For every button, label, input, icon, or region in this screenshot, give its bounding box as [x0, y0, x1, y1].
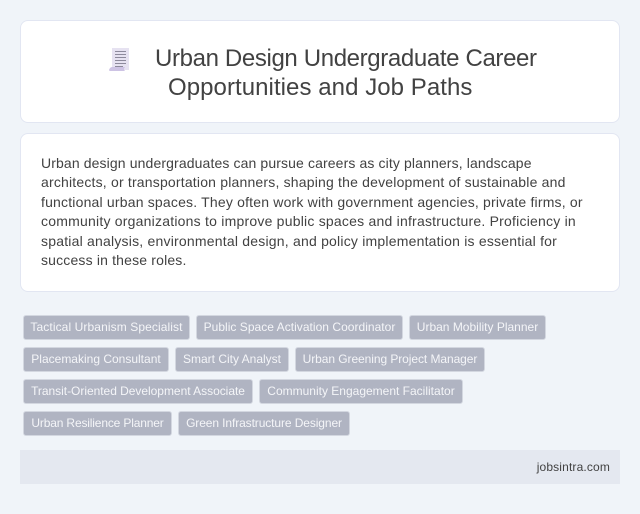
tag: Placemaking Consultant — [31, 352, 161, 366]
tag: Tactical Urbanism Specialist — [30, 320, 183, 334]
tag: Transit-Oriented Development Associate — [31, 384, 245, 398]
tag — [295, 347, 485, 372]
description text: spatial analysis, environmental design, and policy implementation is essential for — [41, 233, 557, 249]
panel: career tags — [23, 315, 546, 436]
tag: Public Space Activation Coordinator — [204, 320, 395, 334]
tag — [23, 315, 190, 340]
footer bar — [20, 450, 620, 484]
description text — [41, 155, 583, 268]
description text: success in these roles. — [41, 252, 187, 268]
tag — [175, 347, 289, 372]
description text: architects, or transportation planners, shaping the development of sustainable and — [41, 174, 566, 190]
footer source text: jobsintra.com — [537, 460, 610, 474]
panel: title card — [20, 20, 620, 123]
tag — [23, 379, 253, 404]
tag: Urban Greening Project Manager — [303, 352, 477, 366]
panel: description card — [20, 133, 620, 292]
tag: Smart City Analyst — [183, 352, 281, 366]
description text: community organizations to improve public spaces and infrastructure. Proficiency in — [41, 213, 576, 229]
icon: document scroll — [109, 48, 129, 71]
tag: Urban Resilience Planner — [31, 416, 164, 430]
title line 2: Opportunities and Job Paths — [168, 74, 472, 100]
description text: Urban design undergraduates can pursue careers as city planners, landscape — [41, 155, 532, 171]
tag — [196, 315, 403, 340]
description text: functional urban spaces. They often work with government agencies, private firms, or — [41, 194, 583, 210]
tag — [23, 411, 172, 436]
tag: Community Engagement Facilitator — [267, 384, 455, 398]
tag — [409, 315, 546, 340]
tag — [178, 411, 350, 436]
tag — [23, 347, 169, 372]
tag: Urban Mobility Planner — [417, 320, 538, 334]
tag: Green Infrastructure Designer — [186, 416, 342, 430]
tag — [259, 379, 463, 404]
title line 1: Urban Design Undergraduate Career — [155, 45, 537, 72]
